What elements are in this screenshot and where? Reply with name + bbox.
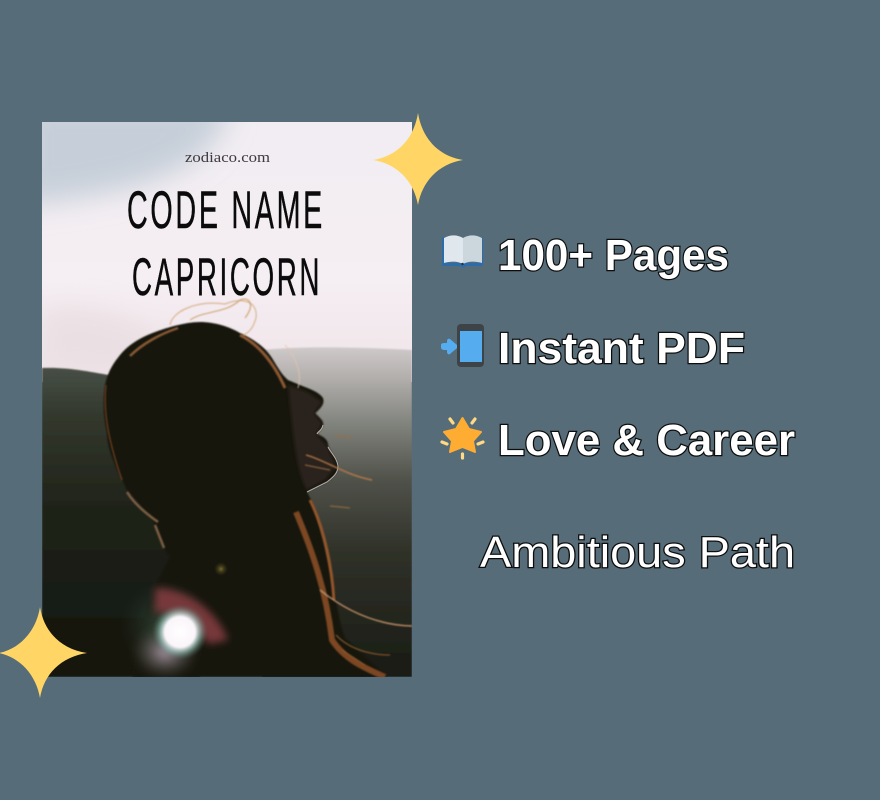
panel: ebook cover <box>20 100 412 680</box>
infographic canvas <box>0 113 796 698</box>
icon: bottom sparkle <box>0 607 87 698</box>
feature label: Instant PDF: Instant PDF <box>498 324 745 373</box>
icon: open book <box>442 235 483 268</box>
cover photo: woman silhouette <box>104 322 387 677</box>
tagline: Ambitious Path: Ambitious Path <box>480 528 795 577</box>
cover photo: sky <box>42 122 412 382</box>
cover photo: backlit hair strands <box>105 299 412 677</box>
icon: glowing star <box>442 418 483 458</box>
cover photo: hills <box>42 347 412 677</box>
feature label: Love & Career: Love & Career <box>498 416 795 465</box>
icon: phone with arrow <box>441 324 484 367</box>
cover title line 1: CODE NAME <box>127 181 325 240</box>
icon: top sparkle <box>373 113 463 205</box>
feature label: 100+ Pages: 100+ Pages <box>498 231 729 280</box>
cover photo: lens flare <box>132 563 231 677</box>
cover title line 2: CAPRICORN <box>132 248 322 307</box>
website label: zodiaco.com <box>185 150 270 166</box>
